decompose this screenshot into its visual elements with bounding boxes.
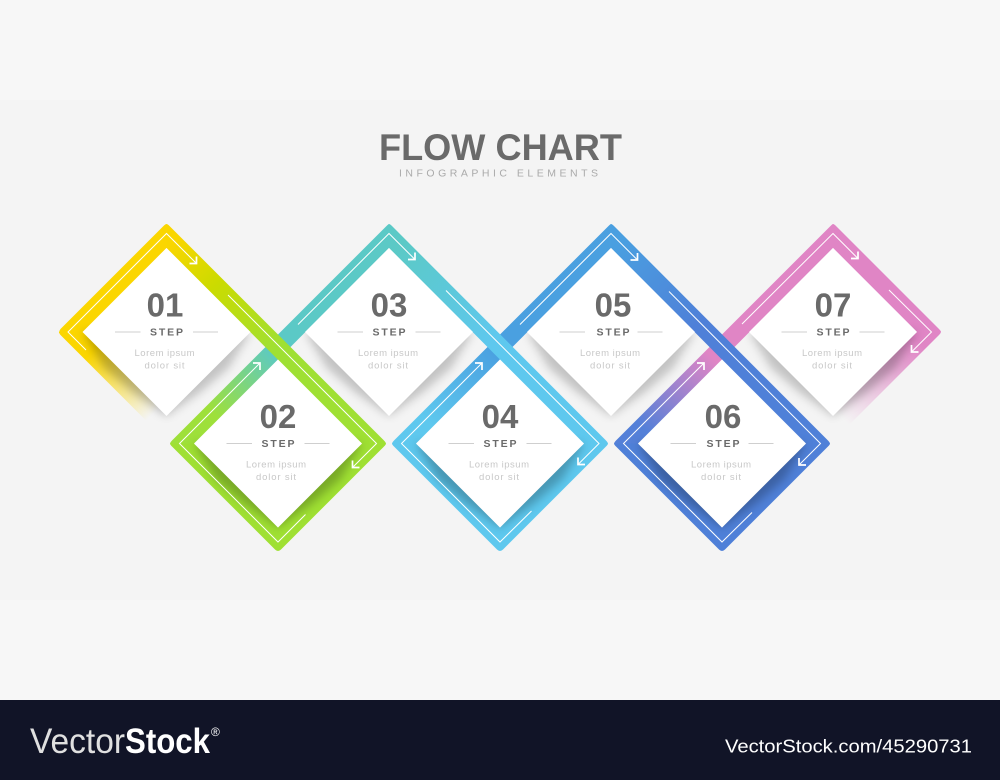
card shadows cast on the background bbox=[166, 332, 833, 416]
card: step 04: Lorem ipsum bbox=[469, 460, 529, 470]
card: step 03: Lorem ipsum bbox=[358, 348, 418, 359]
arrow: step 04 path bbox=[402, 363, 532, 542]
card: step 06: STEP bbox=[706, 438, 740, 450]
card: step 03: 03 bbox=[371, 287, 407, 324]
ribbon: step 02 to step 03 band bbox=[170, 224, 389, 444]
ribbon: step 01 to step 02 band bbox=[166, 224, 386, 444]
card: step 01: STEP bbox=[150, 327, 183, 339]
footer logo bbox=[30, 722, 220, 761]
card: step 05: dolor sit bbox=[590, 360, 630, 371]
card: step 07 bbox=[749, 248, 917, 416]
card: step 03: STEP bbox=[372, 327, 406, 339]
arrow: step 01 path bbox=[68, 234, 196, 350]
arrow: step 05 path bbox=[520, 234, 638, 324]
card: step 05: STEP bbox=[596, 327, 630, 339]
card: step 01: 01 bbox=[147, 287, 183, 324]
ribbon: step 01 upper-left band bbox=[59, 224, 166, 333]
ribbon: step 03 to step 04 band bbox=[389, 224, 608, 444]
background: lower band bbox=[0, 600, 1000, 700]
card: step 05 bbox=[527, 248, 695, 416]
ribbon: step 04 lower ring bbox=[392, 444, 608, 551]
card: step 02: STEP bbox=[262, 438, 294, 450]
card: step 07: 07 bbox=[815, 287, 851, 324]
title: FLOW CHART bbox=[379, 127, 622, 168]
card: step 02: Lorem ipsum bbox=[246, 460, 306, 470]
card: step 04: STEP bbox=[484, 438, 516, 450]
card: step 03: dolor sit bbox=[368, 360, 408, 371]
arrow: step 03 path bbox=[298, 234, 415, 324]
card: step 06: Lorem ipsum bbox=[691, 460, 751, 470]
card: step 06: dolor sit bbox=[701, 472, 741, 483]
arrow: step 07 right path bbox=[889, 290, 932, 352]
background: upper band bbox=[0, 0, 1000, 100]
subtitle: INFOGRAPHIC ELEMENTS bbox=[399, 168, 598, 180]
card: step 02: 02 bbox=[260, 398, 296, 435]
arrow: step 02 path bbox=[180, 363, 306, 542]
arrow: step 06 path bbox=[624, 363, 752, 542]
footer logo: Vector bbox=[30, 722, 125, 761]
card: step 05: Lorem ipsum bbox=[580, 348, 640, 359]
arrow: step 07 left path bbox=[742, 234, 858, 324]
card: step 06 bbox=[638, 360, 806, 528]
footer logo: ® bbox=[211, 725, 220, 739]
ribbon: step 02 lower ring bbox=[170, 444, 386, 551]
footer bar bbox=[0, 700, 1000, 780]
footer image id: VectorStock.com/45290731 bbox=[725, 736, 972, 756]
card: step 05: 05 bbox=[595, 287, 631, 324]
card: step 04 bbox=[416, 360, 584, 528]
arrow: step 01 to 02 path bbox=[228, 295, 376, 468]
card: step 04: dolor sit bbox=[479, 472, 519, 483]
ribbon: step 05 to step 06 band bbox=[611, 224, 830, 444]
card: step 02: dolor sit bbox=[256, 472, 296, 483]
ribbon: step 06 to step 07 band bbox=[614, 224, 833, 444]
card: step 04: 04 bbox=[482, 398, 519, 435]
card shadows cast on the ribbons bbox=[82, 332, 917, 528]
ribbon: step 06 lower ring bbox=[614, 444, 830, 551]
card: step 06: 06 bbox=[705, 398, 741, 435]
ribbon: step 07 fading lower-right band bbox=[833, 332, 941, 441]
card: step 01 bbox=[82, 248, 250, 416]
ribbon: step 01 fading lower-left band bbox=[59, 332, 166, 441]
arrow: step 03 to 04 path bbox=[446, 290, 599, 464]
footer logo: Stock bbox=[125, 722, 210, 761]
arrow: step 05 to 06 path bbox=[669, 292, 820, 465]
card: step 03 bbox=[305, 248, 473, 416]
ribbon: step 04 to step 05 band bbox=[392, 224, 611, 444]
card: step 07: Lorem ipsum bbox=[802, 348, 862, 359]
card: step 01: dolor sit bbox=[144, 360, 185, 371]
card: step 07: dolor sit bbox=[812, 360, 852, 371]
ribbon: step 07 upper-right band bbox=[833, 224, 941, 332]
card: step 01: Lorem ipsum bbox=[134, 348, 195, 359]
card: step 07: STEP bbox=[816, 327, 850, 339]
card: step 02 bbox=[194, 360, 362, 528]
background: main panel bbox=[0, 100, 1000, 600]
